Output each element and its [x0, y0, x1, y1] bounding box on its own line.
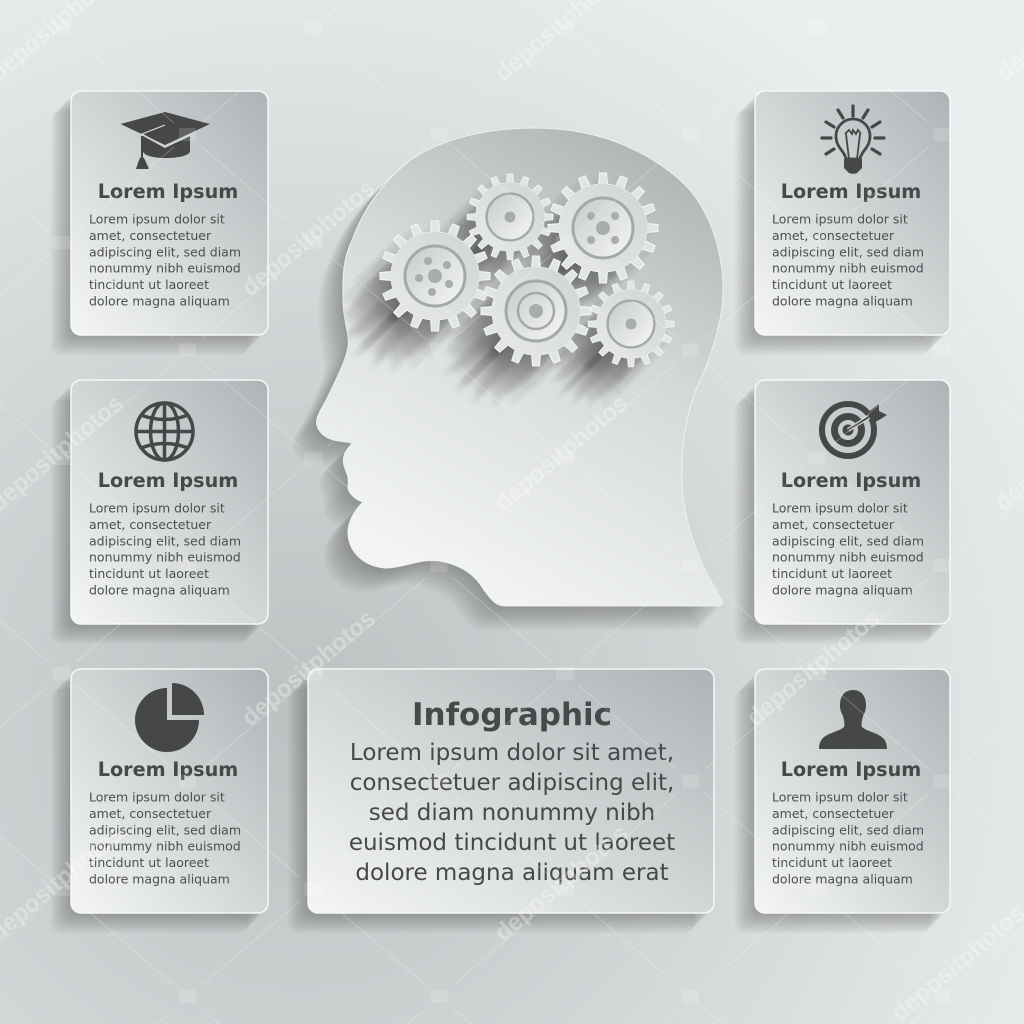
stock watermarks: depositphotos: [490, 820, 634, 947]
body text: adipiscing elit, sed diam: [89, 533, 241, 548]
panel: statistics: [71, 669, 268, 913]
panel: idea: [755, 91, 950, 335]
head shadow: [293, 130, 721, 630]
body text: dolore magna aliquam: [772, 294, 913, 308]
body text: Lorem ipsum dolor sit: [89, 212, 225, 226]
body text: amet, consectetuer: [89, 517, 212, 532]
panel: person: [755, 669, 950, 913]
icon: light bulb: [822, 106, 884, 174]
body text: dolore magna aliquam: [89, 582, 230, 598]
heading: Lorem Ipsum: [98, 469, 238, 492]
panel: target: [755, 380, 950, 624]
gear: centre: [481, 256, 591, 366]
body text: amet, consectetuer: [89, 806, 212, 821]
body text: Lorem ipsum dolor sit amet,: [350, 740, 674, 766]
gear: top small: [467, 174, 553, 260]
icon: globe: [136, 403, 193, 460]
body text: amet, consectetuer: [89, 228, 212, 243]
panel: central infographic: [308, 669, 714, 913]
body text: dolore magna aliquam: [772, 582, 913, 598]
body text: euismod tincidunt ut laoreet: [349, 830, 675, 856]
card: [71, 91, 268, 335]
body text: nonummy nibh euismod: [89, 839, 241, 854]
stock watermarks: depositphotos: [237, 175, 381, 302]
card: [755, 91, 950, 335]
body text: tincidunt ut laoreet: [772, 566, 892, 581]
body text: nonummy nibh euismod: [772, 550, 924, 565]
body text: adipiscing elit, sed diam: [89, 244, 241, 259]
head shape: [317, 128, 723, 606]
body text: Lorem ipsum dolor sit: [89, 500, 225, 516]
body text: amet, consectetuer: [772, 517, 895, 532]
card: [308, 669, 714, 913]
card: [755, 669, 950, 913]
icon: target with arrow: [822, 404, 887, 456]
body text: dolore magna aliquam erat: [355, 860, 669, 886]
body text: tincidunt ut laoreet: [89, 855, 209, 870]
body text: dolore magna aliquam: [89, 294, 230, 308]
body text: tincidunt ut laoreet: [89, 277, 209, 292]
gear: top right: [548, 173, 658, 283]
body text: adipiscing elit, sed diam: [772, 244, 924, 259]
body text: adipiscing elit, sed diam: [772, 533, 924, 548]
body text: dolore magna aliquam: [772, 872, 913, 886]
stock watermarks: depositphotos: [742, 605, 886, 732]
body text: tincidunt ut laoreet: [89, 566, 209, 581]
head silhouette with gears: [293, 128, 723, 630]
body text: tincidunt ut laoreet: [772, 855, 892, 870]
heading: Infographic: [412, 697, 612, 733]
body text: nonummy nibh euismod: [772, 261, 924, 276]
icon: pie chart: [135, 683, 204, 752]
stock watermarks: depositphotos: [490, 390, 634, 517]
body text: Lorem ipsum dolor sit: [772, 790, 908, 804]
body text: adipiscing elit, sed diam: [772, 822, 924, 837]
icon: person silhouette: [819, 690, 887, 749]
body text: Lorem ipsum dolor sit: [89, 790, 225, 804]
panel: education: [71, 91, 268, 335]
card: [71, 380, 268, 624]
panel shadows: [51, 93, 948, 933]
heading: Lorem Ipsum: [781, 758, 921, 781]
heading: Lorem Ipsum: [781, 469, 921, 492]
body text: amet, consectetuer: [772, 806, 895, 821]
gear: lower right: [588, 281, 674, 367]
gear: left: [380, 221, 490, 331]
body text: adipiscing elit, sed diam: [89, 822, 241, 837]
heading: Lorem Ipsum: [781, 180, 921, 203]
body text: consectetuer adipiscing elit,: [350, 770, 674, 796]
heading: Lorem Ipsum: [98, 758, 238, 781]
body text: amet, consectetuer: [772, 228, 895, 243]
icon: graduation cap: [120, 112, 210, 169]
gear long shadows: [338, 176, 671, 409]
card: [755, 380, 950, 624]
body text: sed diam nonummy nibh: [369, 800, 655, 826]
panel: global: [71, 380, 268, 624]
body text: nonummy nibh euismod: [89, 261, 241, 276]
body text: dolore magna aliquam: [89, 872, 230, 886]
card: [71, 669, 268, 913]
body text: tincidunt ut laoreet: [772, 277, 892, 292]
body text: Lorem ipsum dolor sit: [772, 212, 908, 226]
body text: Lorem ipsum dolor sit: [772, 500, 908, 516]
body text: nonummy nibh euismod: [772, 839, 924, 854]
heading: Lorem Ipsum: [98, 180, 238, 203]
stock watermarks: depositphotos: [237, 605, 381, 732]
body text: nonummy nibh euismod: [89, 550, 241, 565]
